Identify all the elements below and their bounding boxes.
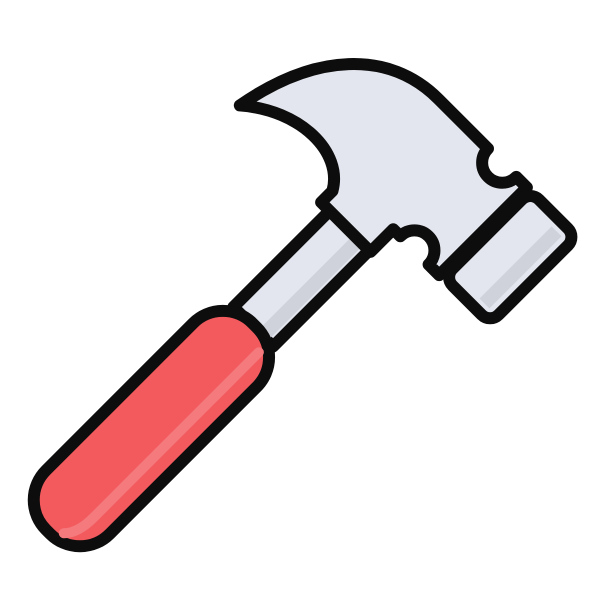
hammer head xyxy=(232,3,576,347)
handle shaft xyxy=(233,207,373,347)
handle grip xyxy=(16,294,286,564)
